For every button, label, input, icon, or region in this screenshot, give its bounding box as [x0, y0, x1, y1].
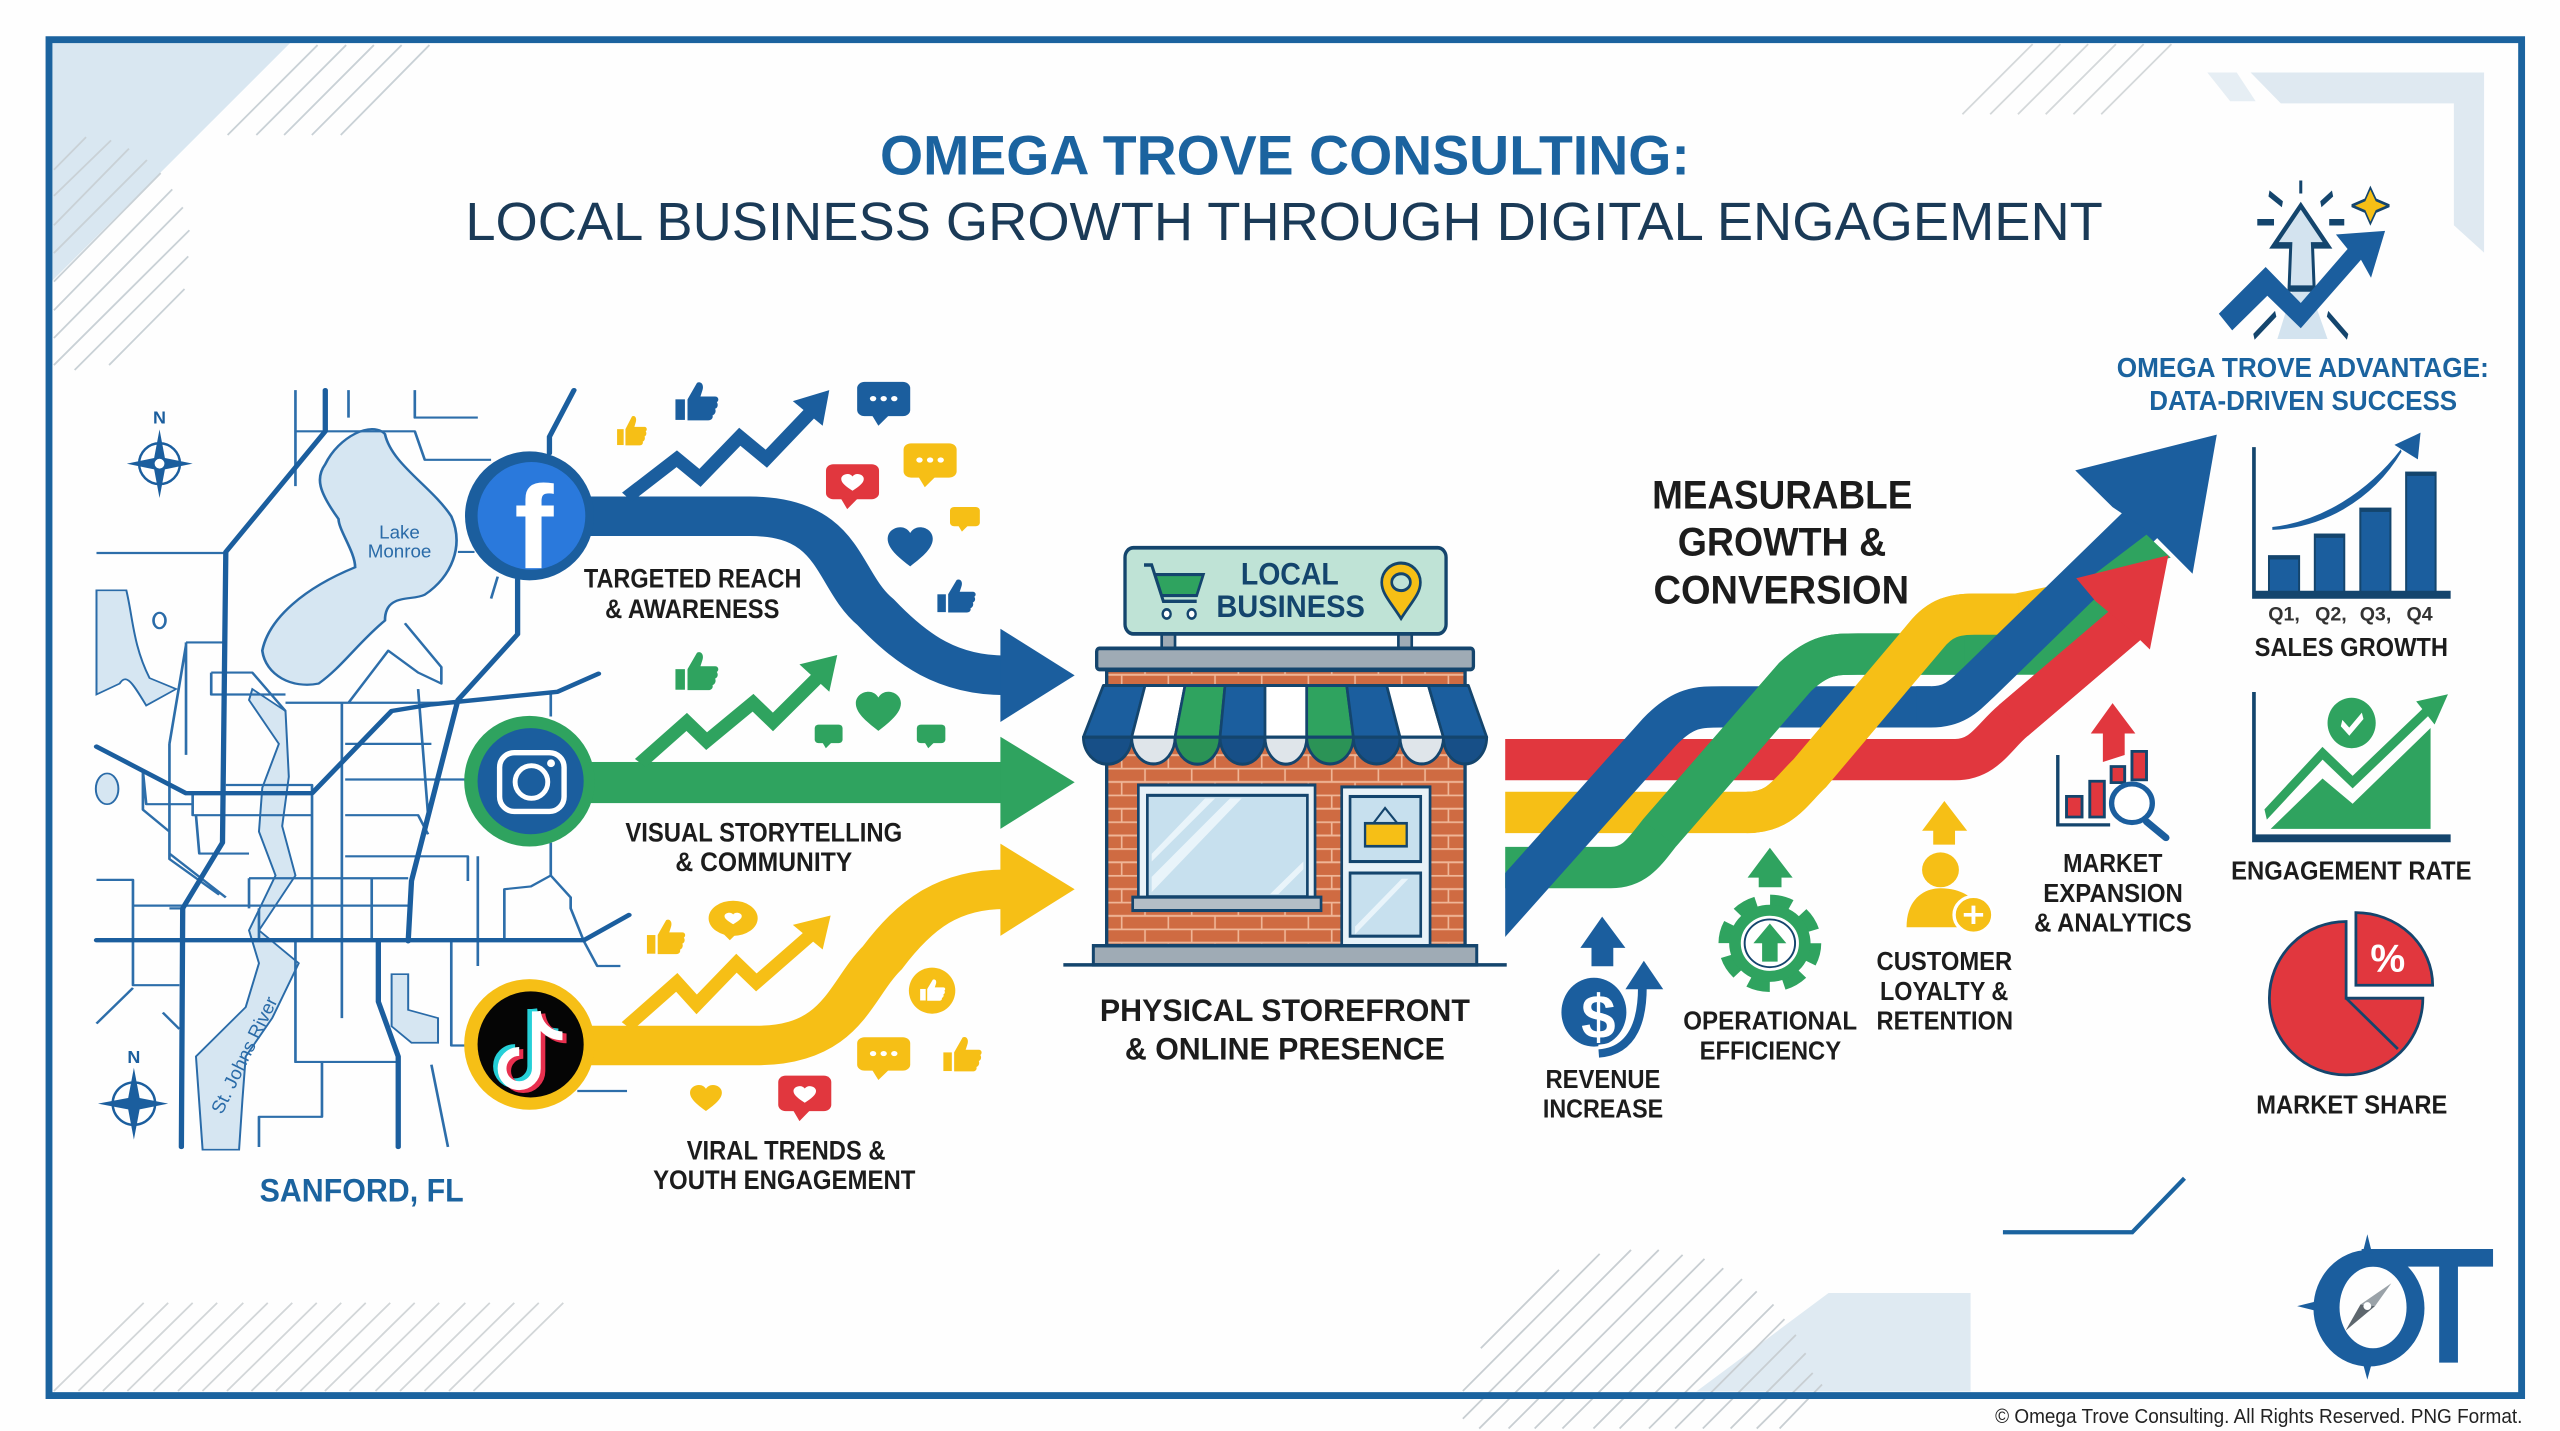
- chart: market share pie: %: [2370, 937, 2405, 980]
- label: market share: MARKET SHARE: [2256, 1089, 2447, 1119]
- sign text: business: BUSINESS: [1216, 588, 1365, 624]
- sign posts: [1162, 634, 1412, 648]
- chart quarter labels: Q1,: [2268, 603, 2300, 625]
- icon: customer loyalty: [1907, 801, 1993, 933]
- chart quarter labels: Q2,: [2315, 603, 2347, 625]
- social flows: [584, 382, 1075, 1121]
- label: market expansion: & ANALYTICS: [2034, 908, 2192, 938]
- heading: measurable growth: CONVERSION: [1654, 568, 1909, 613]
- label: market expansion: [2034, 848, 2192, 938]
- title line one: OMEGA TROVE CONSULTING:: [880, 125, 1690, 187]
- label: customer loyalty: RETENTION: [1877, 1006, 2013, 1036]
- compass rose upper: [127, 408, 193, 498]
- ribbon: blue top: [1916, 507, 2159, 707]
- ribbon: green: [1505, 600, 2108, 888]
- awning: [1083, 686, 1487, 764]
- reactions: TikTok: [647, 901, 982, 1121]
- label: revenue increase: REVENUE: [1545, 1064, 1660, 1094]
- label: storefront: & ONLINE PRESENCE: [1125, 1031, 1445, 1067]
- label: visual storytelling: VISUAL STORYTELLING: [625, 817, 902, 847]
- heading: measurable growth: [1652, 473, 1912, 613]
- label: engagement rate: ENGAGEMENT RATE: [2231, 855, 2471, 885]
- pond: [96, 773, 118, 804]
- river: [196, 689, 299, 1150]
- chart: market share pie: [2269, 913, 2433, 1075]
- storefront: [1063, 548, 1507, 965]
- label: viral trends: YOUTH ENGAGEMENT: [653, 1165, 916, 1195]
- label: sales growth: SALES GROWTH: [2255, 632, 2448, 662]
- ground line: [1063, 960, 1507, 969]
- label: revenue increase: [1543, 1064, 1663, 1124]
- label: operational efficiency: EFFICIENCY: [1700, 1036, 1841, 1066]
- label: customer loyalty: [1877, 946, 2013, 1036]
- label: storefront: PHYSICAL STOREFRONT: [1100, 992, 1470, 1028]
- icon: location pin: [1382, 563, 1420, 619]
- lake: [262, 429, 456, 685]
- heading: omega trove advantage: [2117, 352, 2489, 416]
- label: operational efficiency: [1683, 1006, 1857, 1066]
- label: targeted reach: TARGETED REACH: [584, 564, 801, 594]
- label: operational efficiency: OPERATIONAL: [1683, 1006, 1857, 1036]
- label: visual storytelling: & COMMUNITY: [675, 847, 852, 877]
- compass needle: [2346, 1283, 2391, 1331]
- sign board: [1125, 548, 1446, 634]
- brick wall: [1107, 670, 1465, 946]
- flow: Facebook blue arrow: [584, 390, 1075, 722]
- chart quarter labels: [2268, 603, 2433, 625]
- arrowhead: green: [2086, 535, 2171, 581]
- heading: omega trove advantage: OMEGA TROVE ADVANTAGE:: [2117, 352, 2489, 383]
- title line two: LOCAL BUSINESS GROWTH THROUGH DIGITAL ENGAGEMENT: [465, 192, 2103, 252]
- roof bar: [1097, 648, 1473, 669]
- map of Sanford: [96, 390, 629, 1209]
- heading: omega trove advantage: DATA-DRIVEN SUCCESS: [2149, 385, 2457, 416]
- icon: Instagram: [464, 716, 595, 847]
- icon: shopping cart: [1144, 565, 1203, 619]
- label: customer loyalty: LOYALTY &: [1880, 976, 2008, 1006]
- arrowhead: blue: [2075, 435, 2217, 574]
- label: market expansion: EXPANSION: [2043, 878, 2183, 908]
- sign text: local: LOCAL: [1241, 555, 1339, 591]
- compass rose lower: N: [127, 1047, 140, 1067]
- map geography and roads: [96, 390, 629, 1150]
- compass rose lower: [98, 1047, 168, 1140]
- flow: Instagram green arrow: [584, 655, 1075, 829]
- decorative block bottom-middle: [1463, 1250, 1971, 1429]
- compass ring: [2313, 1250, 2424, 1367]
- compass spike bottom: [2362, 1362, 2372, 1380]
- icon: Facebook: f: [514, 462, 554, 593]
- chart: engagement rate: [2254, 692, 2451, 838]
- label: St. Johns River: St. Johns River: [207, 993, 281, 1117]
- left water: [96, 590, 176, 705]
- growth ribbons: [1480, 435, 2217, 1053]
- icon: revenue increase: [1561, 917, 1663, 1053]
- decorative corner top-left: [52, 42, 429, 370]
- decorative corner top-right: [1962, 44, 2484, 253]
- ribbon: red: [1480, 617, 2134, 760]
- flow: TikTok yellow arrow: [584, 844, 1075, 1045]
- logo: OT compass: [2297, 1234, 2493, 1380]
- compass spike top: [2362, 1234, 2372, 1254]
- right panel icons: [2219, 180, 2451, 838]
- dollar sign: $: [1581, 983, 1616, 1052]
- door: [1342, 787, 1430, 946]
- label: revenue increase: INCREASE: [1543, 1094, 1663, 1124]
- label: Sanford FL: SANFORD, FL: [260, 1172, 464, 1209]
- label: customer loyalty: CUSTOMER: [1877, 946, 2012, 976]
- ribbon: yellow: [1480, 599, 2091, 812]
- icon: advantage arrow: [2219, 180, 2389, 339]
- icon: Facebook: [465, 451, 594, 593]
- label: Lake Monroe: Lake: [379, 521, 420, 542]
- label: Monroe: Monroe: [368, 540, 431, 561]
- chart: sales growth: [2254, 433, 2451, 595]
- ribbon: yellow overlay: [1747, 614, 2018, 812]
- decorative line: [2003, 1178, 2184, 1232]
- pond: [154, 613, 165, 628]
- label: targeted reach: [584, 564, 801, 624]
- decorative hatch bottom-left: [54, 1303, 563, 1391]
- label: targeted reach: & AWARENESS: [605, 594, 779, 624]
- label: market expansion: MARKET: [2063, 848, 2162, 878]
- ribbon: green overlay: [1659, 654, 1965, 833]
- reactions: Instagram: [675, 652, 945, 748]
- label: visual storytelling: [625, 817, 902, 877]
- window: [1133, 785, 1321, 911]
- icon: TikTok: [464, 979, 595, 1110]
- label: viral trends: [653, 1136, 916, 1195]
- T letter: [2362, 1249, 2493, 1363]
- label: storefront: [1100, 992, 1470, 1067]
- compass spike left: [2297, 1301, 2317, 1311]
- reactions: Facebook: [617, 382, 980, 612]
- ribbon: red top: [2013, 617, 2134, 721]
- label: viral trends: VIRAL TRENDS &: [687, 1136, 886, 1166]
- compass rose upper: N: [153, 408, 166, 428]
- chart quarter labels: Q4: [2407, 603, 2433, 625]
- ribbon: blue: [1480, 707, 1931, 933]
- base: [1093, 946, 1477, 965]
- chart quarter labels: Q3,: [2360, 603, 2391, 625]
- icon: operational efficiency: [1725, 848, 1815, 986]
- heading: measurable growth: GROWTH &: [1678, 519, 1886, 564]
- copyright: © Omega Trove Consulting. All Rights Reserved. PNG Format.: [1995, 1406, 2522, 1428]
- arrowhead: red: [2076, 555, 2168, 649]
- minor roads: [96, 390, 627, 1147]
- title: [465, 125, 2103, 252]
- heading: measurable growth: MEASURABLE: [1652, 473, 1912, 518]
- major roads: [96, 390, 629, 1147]
- block: [392, 974, 438, 1043]
- icon: market expansion: [2058, 703, 2166, 838]
